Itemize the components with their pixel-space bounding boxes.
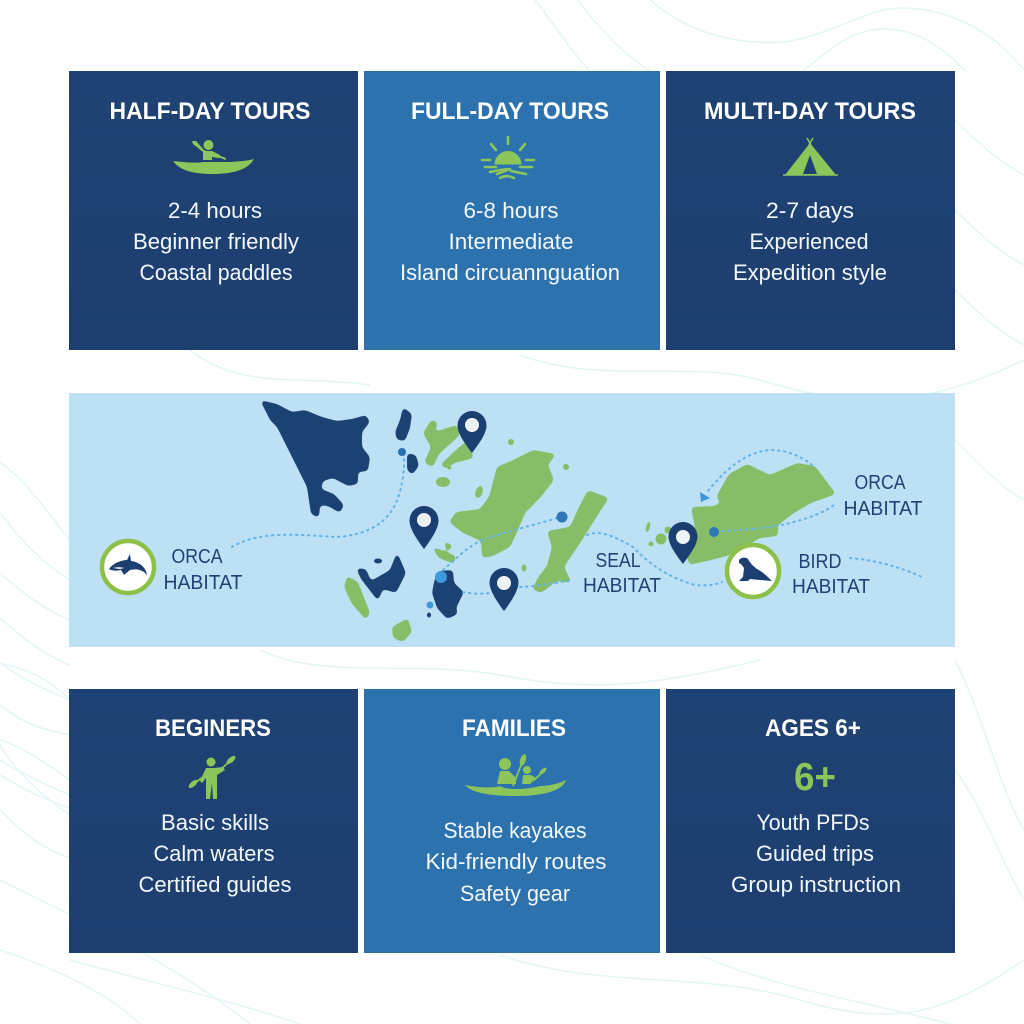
label: bird habitat <box>792 551 870 598</box>
text: half-day details <box>133 198 299 285</box>
panel: full-day tours <box>364 71 660 350</box>
text: ages details: Youth PFDs <box>756 810 870 835</box>
map: dark islands <box>260 400 464 619</box>
text: half-day details: Coastal paddles <box>140 260 292 285</box>
label: orca habitat left <box>164 546 242 594</box>
label: orca habitat left: HABITAT <box>164 572 242 594</box>
heading: families: FAMILIES <box>462 715 566 742</box>
label: orca habitat right: ORCA <box>854 472 906 494</box>
heading: full-day tours: FULL-DAY TOURS <box>411 98 609 125</box>
arrow: route arrowhead <box>700 492 710 502</box>
text: full-day details: Island circuannguation <box>400 260 620 285</box>
icon: kayak <box>173 140 254 174</box>
text: multi-day details: Experienced <box>750 229 868 254</box>
map: dotted routes <box>232 450 922 594</box>
icon: person with paddle <box>187 754 237 799</box>
icon: seal badge <box>727 545 779 597</box>
label: orca habitat right <box>844 472 922 520</box>
heading: ages 6+: AGES 6+ <box>765 715 861 742</box>
label: bird habitat: BIRD <box>798 551 842 573</box>
panel: families <box>364 689 660 953</box>
text: full-day details: 6-8 hours <box>464 198 558 223</box>
map: location pins <box>410 411 698 611</box>
text: beginners details <box>138 810 292 897</box>
text: multi-day details: 2-7 days <box>766 198 854 223</box>
panel: ages 6+ <box>666 689 955 953</box>
text: families details: Safety gear <box>460 881 570 906</box>
icon: sun over water <box>482 137 534 178</box>
heading: half-day tours: HALF-DAY TOURS <box>110 98 310 125</box>
text: ages details: Group instruction <box>731 872 901 897</box>
text: families details <box>426 818 606 906</box>
map: green islands <box>344 419 836 642</box>
text: ages details: Guided trips <box>756 841 874 866</box>
label: seal habitat: HABITAT <box>583 575 661 597</box>
panel: habitat map <box>69 393 955 647</box>
text: half-day details: Beginner friendly <box>133 229 299 254</box>
text: families details: Kid-friendly routes <box>426 849 606 874</box>
icon: family kayak <box>465 753 566 796</box>
text: beginners details: Basic skills <box>161 810 269 835</box>
text: beginners details: Certified guides <box>138 872 292 897</box>
label: seal habitat <box>583 550 661 597</box>
label: seal habitat: SEAL <box>596 550 640 572</box>
text: full-day details: Intermediate <box>448 229 574 254</box>
panel: multi-day tours <box>666 71 955 350</box>
text: ages details <box>731 810 901 897</box>
heading: multi-day tours: MULTI-DAY TOURS <box>704 98 916 125</box>
icon: 6+ badge: 6+ <box>794 756 836 799</box>
icon: orca badge <box>102 541 154 593</box>
label: bird habitat: HABITAT <box>792 576 870 598</box>
text: beginners details: Calm waters <box>154 841 274 866</box>
panel: half-day tours <box>69 71 358 350</box>
text: full-day details <box>400 198 620 285</box>
map: route dots <box>398 448 719 608</box>
icon: tent <box>783 138 838 175</box>
text: families details: Stable kayakes <box>444 818 586 843</box>
panel: beginners <box>69 689 358 953</box>
label: orca habitat left: ORCA <box>172 546 223 568</box>
heading: beginners: BEGINERS <box>155 715 271 742</box>
text: half-day details: 2-4 hours <box>168 198 262 223</box>
text: multi-day details: Expedition style <box>733 260 887 285</box>
label: orca habitat right: HABITAT <box>844 498 922 520</box>
text: multi-day details <box>733 198 887 285</box>
